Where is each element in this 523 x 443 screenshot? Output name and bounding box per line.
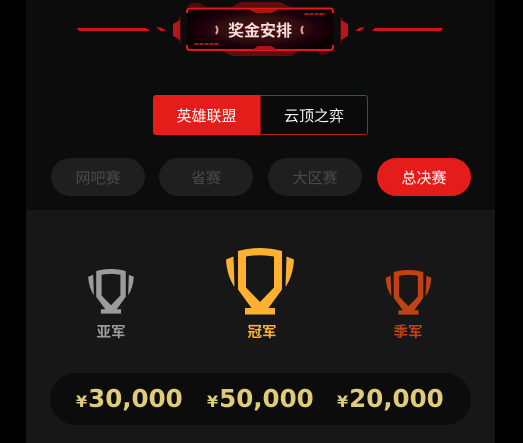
prize: third place: ¥20,000 (337, 384, 444, 413)
banner frame (187, 2, 333, 56)
title text: 奖金安排 (228, 21, 292, 40)
label: 季军: 季军 (394, 324, 422, 340)
tab: 英雄联盟 active (153, 95, 260, 135)
prize: second place: ¥30,000 (76, 384, 183, 413)
prize bar (50, 373, 471, 425)
stage pill: 省赛: 省赛 (191, 170, 221, 186)
icon: bronze trophy (386, 270, 432, 315)
upper dark background (26, 0, 495, 210)
left side ornaments (77, 16, 181, 44)
tab: 英雄联盟 active: 英雄联盟 (176, 108, 236, 124)
label: 冠军: 冠军 (248, 324, 276, 340)
tab: 云顶之弈 (260, 95, 368, 135)
stage pill: 网吧赛 (51, 158, 145, 196)
stage pill: 大区赛 (268, 158, 362, 196)
chevrons (216, 26, 303, 34)
label: 亚军: 亚军 (96, 324, 126, 340)
stage pill: 总决赛 active (377, 158, 471, 196)
stage pill: 网吧赛: 网吧赛 (75, 170, 120, 186)
tab: 云顶之弈: 云顶之弈 (284, 108, 344, 124)
stage pill: 省赛 (159, 158, 253, 196)
stage pill: 总决赛 active: 总决赛 (401, 170, 446, 186)
stage pill: 大区赛: 大区赛 (292, 170, 338, 186)
icon: gold trophy (226, 248, 294, 314)
right side ornaments (340, 16, 443, 44)
prize: first place: ¥50,000 (207, 384, 314, 413)
title banner (77, 2, 443, 56)
game tabs (153, 95, 368, 135)
lower panel background (26, 210, 495, 443)
icon: silver trophy (88, 269, 134, 314)
